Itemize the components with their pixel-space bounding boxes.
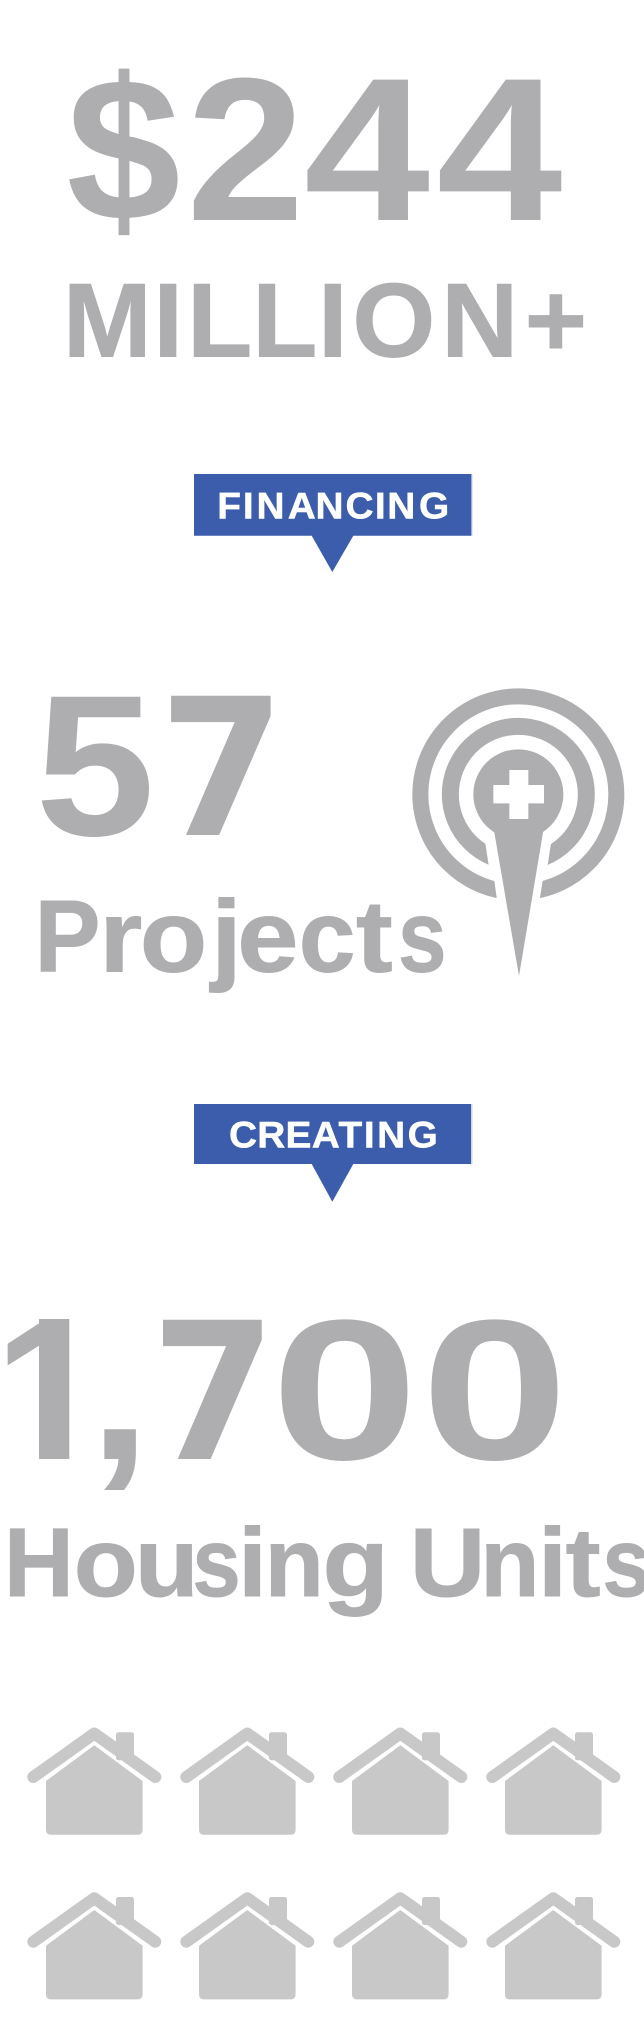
icon: house 1: [33, 1732, 155, 1835]
housing label: s: [192, 1508, 241, 1617]
projects label: r: [99, 880, 142, 994]
housing label: o: [74, 1508, 138, 1617]
icon: location pin with signal rings and medical cross: [420, 696, 616, 980]
icon: house 3: [339, 1732, 461, 1835]
projects figure: 57: 7: [159, 659, 285, 881]
amount figure: $244: 2: [186, 36, 304, 264]
housing label: n: [480, 1508, 540, 1617]
projects label: P: [34, 880, 100, 994]
banner: financing: [194, 474, 472, 572]
icon: house 7: [339, 1897, 461, 1999]
housing label: U: [410, 1508, 485, 1617]
housing label: i: [238, 1508, 267, 1617]
housing label: n: [265, 1508, 324, 1617]
icon: house 2: [186, 1732, 308, 1835]
banner: creating: [194, 1104, 472, 1202]
housing label: t: [566, 1508, 601, 1617]
housing label: i: [538, 1508, 567, 1617]
projects label: j: [209, 880, 242, 994]
housing label: H: [4, 1508, 74, 1617]
icon row: houses, bottom row: [33, 1897, 614, 1999]
housing label: g: [322, 1508, 389, 1617]
housing figure: 1,700: ,: [89, 1279, 151, 1502]
amount unit: MILLION+: MILLION+: [63, 262, 587, 380]
projects label: s: [398, 880, 446, 994]
projects label: c: [299, 880, 355, 994]
housing figure: 1,700: [0, 1279, 568, 1505]
amount figure: $244: $: [66, 36, 180, 264]
icon: house 6: [186, 1897, 308, 1999]
housing label: u: [135, 1508, 199, 1617]
amount figure: $244: 4: [304, 36, 430, 264]
amount figure: $244: 4: [436, 36, 562, 264]
projects label: t: [356, 880, 393, 994]
banner label: financing: FINANCING: [217, 486, 449, 527]
banner label: creating: CREATING: [229, 1115, 438, 1156]
icon row: houses, top row: [33, 1732, 614, 1835]
icon: house 5: [33, 1897, 155, 1999]
housing figure: 1,700: 0: [271, 1279, 418, 1502]
projects label: e: [237, 880, 298, 994]
projects label: o: [140, 880, 207, 994]
icon: house 4: [492, 1732, 614, 1835]
housing figure: 1,700: 0: [421, 1279, 568, 1502]
projects figure: 57: 5: [35, 653, 155, 878]
icon: house 8: [492, 1897, 614, 1999]
housing figure: 1,700: 7: [151, 1283, 276, 1505]
